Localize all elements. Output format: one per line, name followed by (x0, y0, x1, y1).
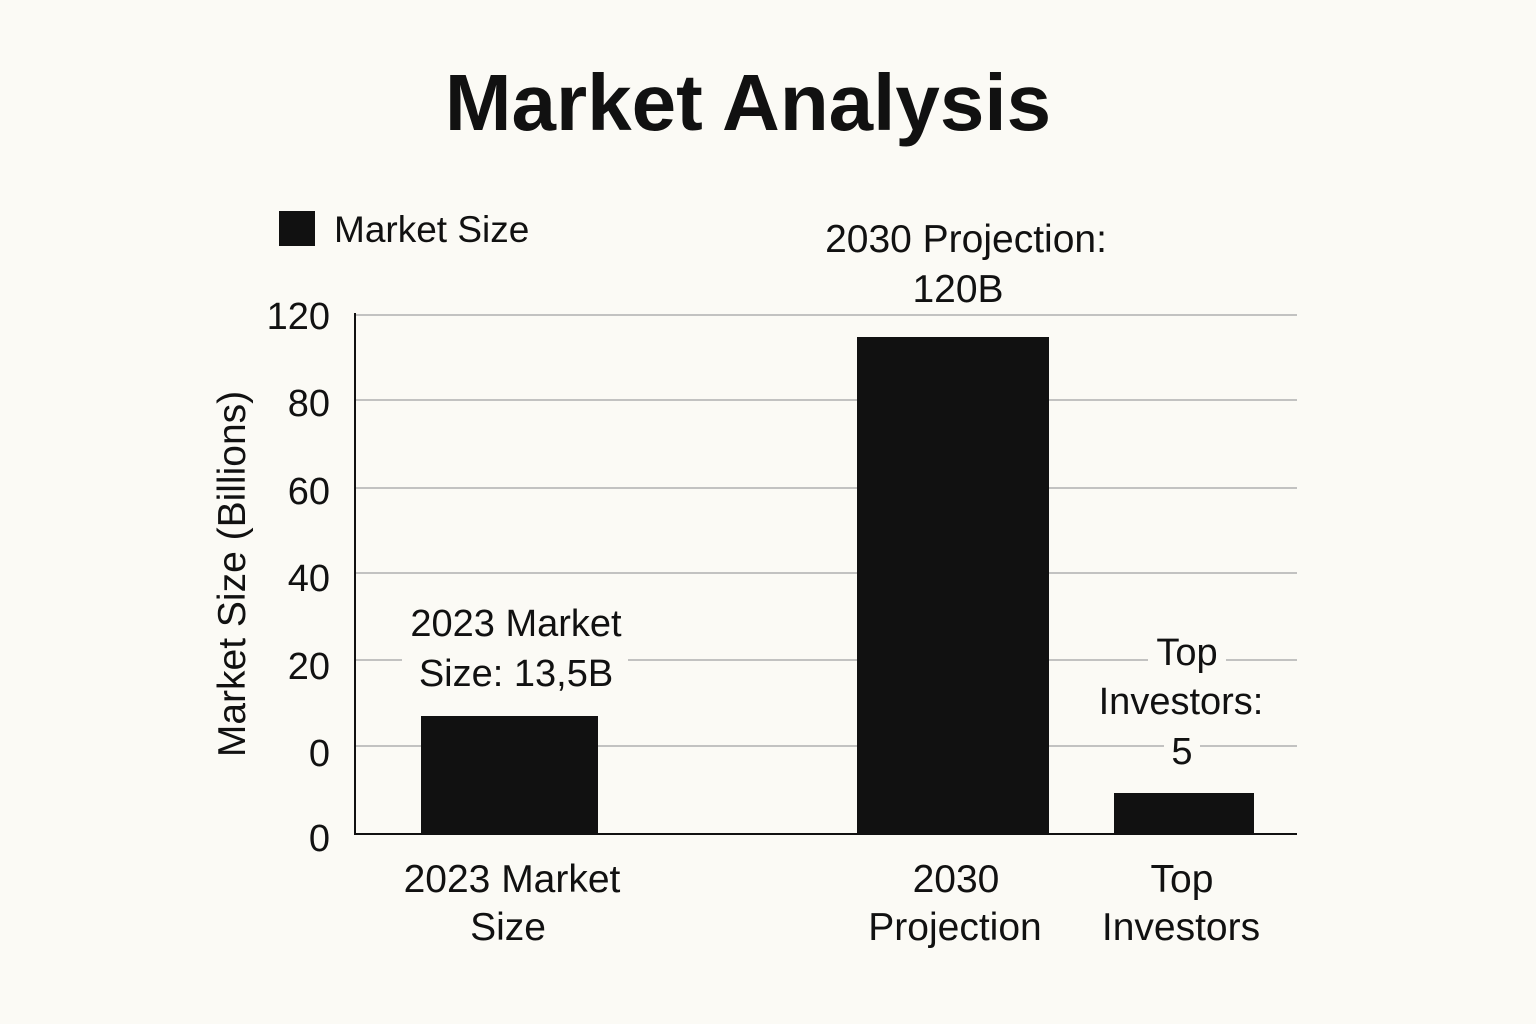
label: 2030 projection value: 120B (912, 268, 1004, 311)
x axis labels: 2023 Market (404, 858, 621, 901)
x axis labels: Projection (868, 906, 1042, 949)
title: Market Analysis (445, 58, 1051, 147)
y axis tick labels (267, 296, 330, 860)
y axis tick labels: 80 (288, 383, 330, 425)
label: 2023 market size value: Size: 13,5B (419, 653, 613, 695)
y axis tick labels: 0 (309, 733, 330, 775)
x axis labels: 2030 (913, 858, 999, 901)
bar: 2030 projection (857, 337, 1049, 834)
bar: top investors (1114, 793, 1254, 834)
x axis labels: Size (470, 906, 546, 949)
y axis tick labels: 40 (288, 558, 330, 600)
label: top investors value: Investors: (1099, 681, 1263, 723)
x axis labels: Top (1151, 858, 1213, 901)
x axis labels: Investors (1102, 906, 1260, 949)
label: top investors value: Top (1156, 632, 1218, 674)
y axis tick labels: 120 (267, 296, 330, 338)
label: 2023 market size value (402, 603, 628, 695)
label: 2030 projection value: 2030 Projection: (825, 218, 1107, 261)
y axis tick labels: 0 (309, 818, 330, 860)
label: top investors value: 5 (1171, 731, 1193, 773)
label: 2023 market size value: 2023 Market (410, 603, 622, 645)
label: 2030 projection value (825, 218, 1107, 311)
axes (354, 313, 1297, 835)
x axis labels (404, 858, 1260, 949)
bar: 2023 market size (421, 716, 598, 834)
y axis title: Market Size (Billions) (211, 391, 254, 757)
label: top investors value (1088, 632, 1276, 773)
legend: Market Size (334, 209, 529, 250)
y axis tick labels: 60 (288, 471, 330, 513)
y axis tick labels: 20 (288, 646, 330, 688)
